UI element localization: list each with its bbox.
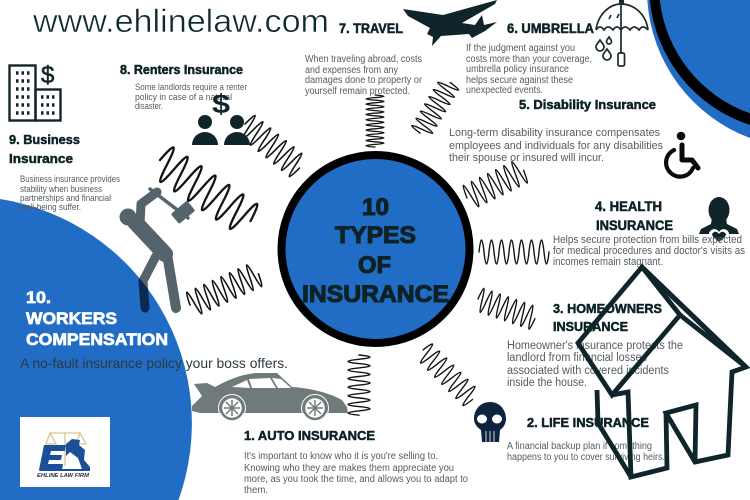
website url: www.ehlinelaw.com — [32, 3, 329, 39]
arrow: spring to homeowners — [474, 288, 539, 330]
text: business: well-being suffer. — [19, 202, 81, 212]
text: umbrella: costs more than your coverage, — [466, 54, 592, 65]
center circle — [282, 155, 470, 343]
text: travel: and expenses from any — [305, 65, 398, 76]
icon: umbrella — [596, 0, 648, 66]
logo: Ehline Law Firm — [20, 417, 110, 487]
text: workers compensation: A no-fault insurance policy your boss offers. — [20, 355, 288, 371]
text: disability: employees and individuals for any disabilities — [449, 140, 663, 152]
text: homeowners: inside the house. — [507, 377, 587, 389]
text: renters: disaster. — [135, 101, 163, 111]
center title: OF — [358, 252, 391, 279]
panel: top right blue circle — [647, 0, 750, 138]
arrow: spring to travel — [366, 95, 384, 147]
icon: dollar and two people — [192, 89, 250, 145]
text: homeowners: Homeowner's insurance protects the — [507, 340, 683, 352]
text: renters: policy in case of a natural — [135, 92, 232, 102]
heading: 6 umbrella: 6. UMBRELLA — [507, 21, 594, 36]
heading: 9 business: 9. Business — [9, 132, 80, 147]
heading: 8 renters: 8. Renters Insurance — [120, 63, 243, 77]
icon: dollar and two people: $ — [212, 89, 230, 119]
icon: airplane — [403, 0, 497, 46]
heading: 10 workers compensation — [26, 289, 168, 349]
text: auto: Knowing who they are makes them appreciate you — [244, 463, 454, 474]
arrow: spring to life — [415, 342, 480, 407]
text: disability: Long-term disability insurance compensates — [449, 127, 660, 139]
center title: INSURANCE — [302, 281, 449, 308]
text: business: Business insurance provides — [20, 174, 121, 184]
heading: 9 business: Insurance — [9, 151, 73, 166]
text: business: partnerships and financial — [20, 193, 111, 203]
text: umbrella: If the judgment against you — [466, 43, 575, 54]
text: travel: When traveling abroad, costs — [305, 54, 422, 65]
heading: 9 business — [9, 132, 80, 166]
text: life — [507, 441, 665, 463]
icon: house outline — [578, 267, 746, 477]
heading: 4 health: INSURANCE — [596, 218, 673, 233]
panel: workers compensation blue circle — [0, 199, 192, 500]
text: travel: yourself remain protected. — [305, 86, 410, 97]
heading: 4 health: 4. HEALTH — [595, 199, 662, 214]
text: health: incomes remain stagnant. — [553, 256, 663, 268]
arrow: spring to disability — [461, 159, 529, 210]
arrow: spring to renters — [237, 114, 308, 178]
arrow: spring to health — [479, 240, 549, 264]
text: disability: their spouse or insured will incur. — [449, 152, 604, 164]
heading: 3 homeowners: 3. HOMEOWNERS — [553, 301, 662, 316]
text: auto: It's important to know who it is you're selling to. — [244, 451, 438, 462]
text: umbrella: umbrella policy insurance — [466, 64, 570, 75]
text: auto — [244, 451, 469, 496]
text: homeowners — [507, 340, 683, 389]
heading: 1 auto: 1. AUTO INSURANCE — [244, 428, 375, 443]
heading: 10 workers compensation: WORKERS — [26, 310, 117, 328]
arrow: spring to auto — [348, 355, 370, 415]
text: umbrella — [466, 43, 592, 96]
arrow: spring to business — [150, 145, 261, 236]
text: disability — [449, 127, 663, 164]
heading: 4 health — [595, 199, 673, 233]
text: auto: more, as you took the time, and allows you to adapt to — [244, 474, 469, 485]
arrow: spring to umbrella — [411, 77, 460, 139]
icon: hammer worker — [120, 189, 195, 308]
text: life: happens to you to cover surviving heirs. — [507, 452, 665, 463]
heading: 10 workers compensation: COMPENSATION — [26, 331, 168, 349]
text: renters — [135, 82, 247, 111]
text: life: A financial backup plan if something — [507, 441, 652, 452]
text: homeowners: landlord from financial losses — [507, 352, 647, 364]
text: travel: damages done to property or — [305, 75, 423, 86]
center title: 10 — [362, 194, 389, 221]
icon: sports car — [192, 373, 348, 422]
center title: TYPES — [335, 222, 416, 249]
center title — [302, 194, 449, 308]
text: business — [19, 174, 121, 212]
heading: 3 homeowners — [553, 301, 662, 334]
text: renters: Some landlords require a renter — [135, 82, 247, 92]
text: umbrella: unexpected events. — [466, 85, 543, 96]
logo: Ehline Law Firm: EHLINE LAW FIRM — [37, 473, 89, 479]
icon: office buildings — [10, 62, 60, 120]
icon: office buildings: $ — [41, 62, 54, 89]
icon: wheelchair — [666, 132, 698, 177]
heading: 2 life: 2. LIFE INSURANCE — [527, 415, 649, 430]
text: umbrella: helps secure against these — [466, 75, 573, 86]
heading: 10 workers compensation: 10. — [26, 289, 51, 307]
text: business: stability when business — [20, 184, 103, 194]
icon: person with heart — [699, 197, 739, 244]
text: health — [553, 234, 746, 268]
icon: skull — [474, 402, 506, 442]
arrow: spring to workers compensation — [185, 262, 264, 317]
heading: 7 travel: 7. TRAVEL — [339, 21, 403, 36]
text: auto: them. — [244, 485, 268, 496]
heading: 3 homeowners: INSURANCE — [553, 319, 628, 334]
heading: 5 disability: 5. Disability Insurance — [519, 97, 656, 112]
text: travel — [305, 54, 423, 97]
text: homeowners: associated with covered incidents — [507, 365, 669, 377]
